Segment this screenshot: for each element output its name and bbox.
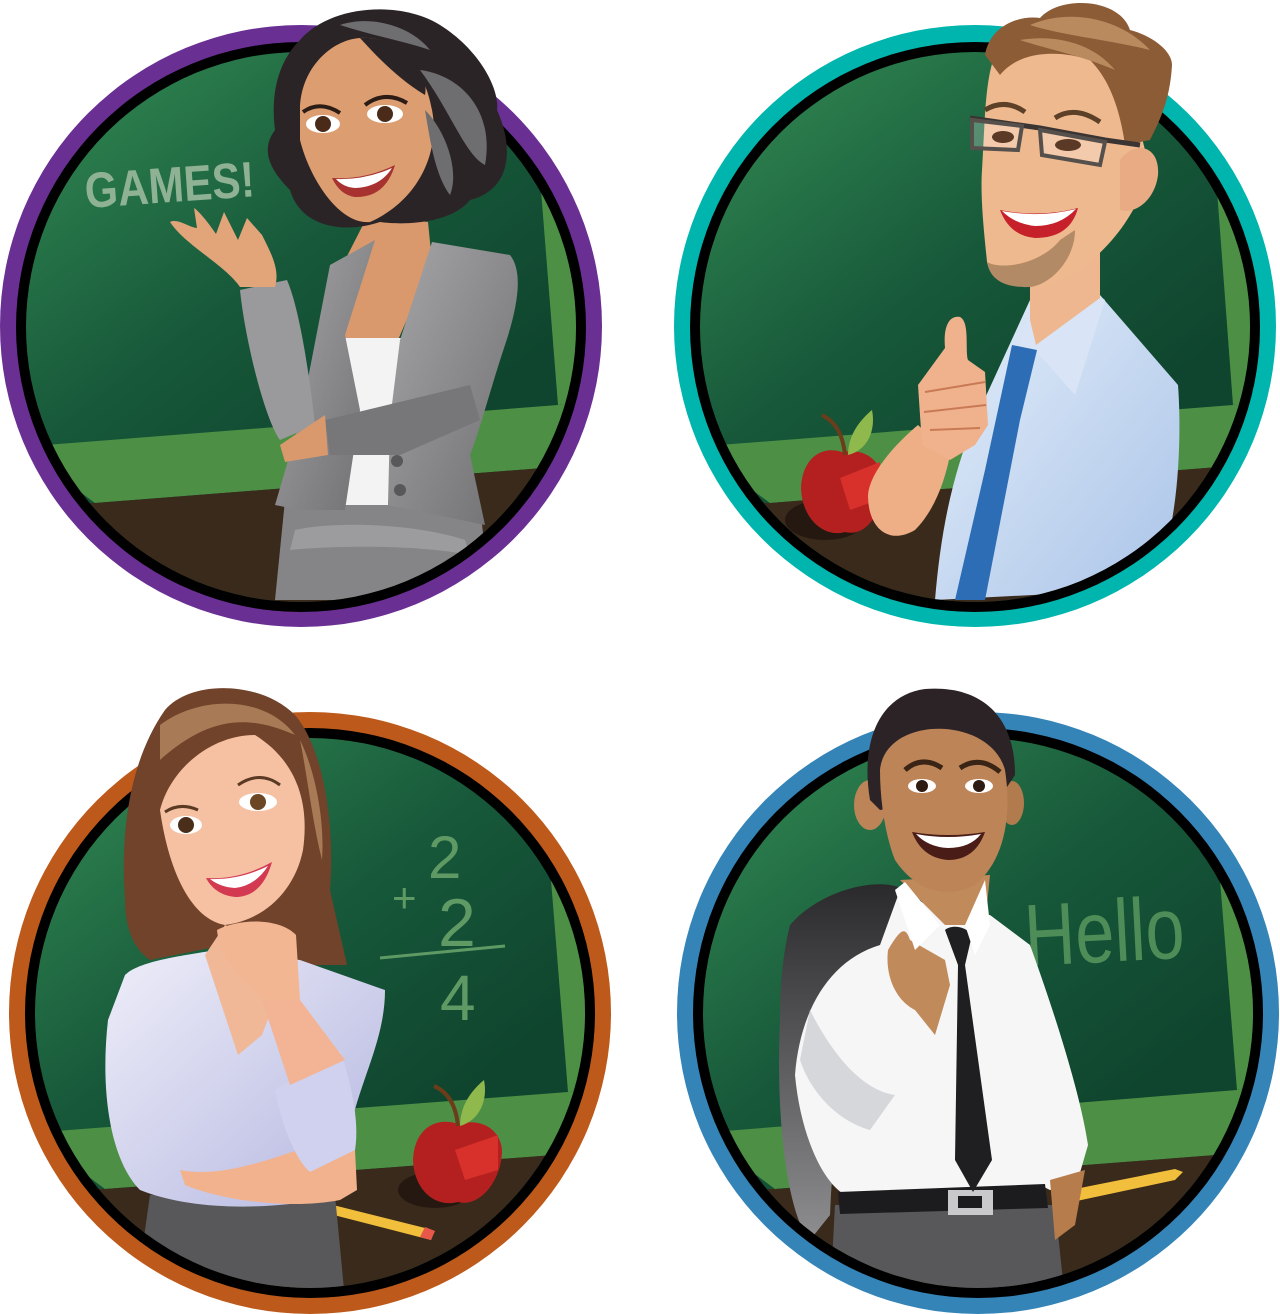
chalk text: Hello: Hello	[1022, 878, 1187, 985]
panel: purple badge	[0, 9, 620, 630]
icon: red apple	[785, 410, 882, 540]
classroom background	[703, 740, 1253, 1288]
chalk text: GAMES!: GAMES!	[83, 151, 256, 219]
panel: orange badge	[9, 688, 620, 1314]
classroom background	[35, 738, 585, 1288]
icon: red apple	[398, 1080, 502, 1208]
chalk sum: 2 + 2 = 4: 2	[438, 885, 476, 961]
teacher: man with jacket over shoulder	[779, 689, 1088, 1300]
chalk sum: 2 + 2 = 4: 2	[428, 824, 461, 891]
panel: teal badge	[674, 3, 1280, 630]
chalk sum: 2 + 2 = 4: 4	[440, 962, 476, 1034]
classroom background	[26, 52, 576, 602]
chalk sum: 2 + 2 = 4	[380, 824, 505, 1034]
classroom background	[700, 52, 1250, 602]
blue ring	[677, 712, 1279, 1314]
teacher: woman with hand on chin	[105, 688, 385, 1300]
panel: blue badge	[677, 689, 1280, 1314]
icon: pencil	[322, 1203, 435, 1240]
purple ring	[0, 25, 602, 627]
orange ring	[9, 712, 611, 1314]
teacher: man with glasses giving thumbs up	[868, 3, 1179, 600]
chalk sum: 2 + 2 = 4: +	[392, 874, 417, 921]
icon: pencil	[1070, 1169, 1183, 1202]
teacher: woman in grey suit	[170, 9, 518, 600]
teal ring	[674, 25, 1276, 627]
